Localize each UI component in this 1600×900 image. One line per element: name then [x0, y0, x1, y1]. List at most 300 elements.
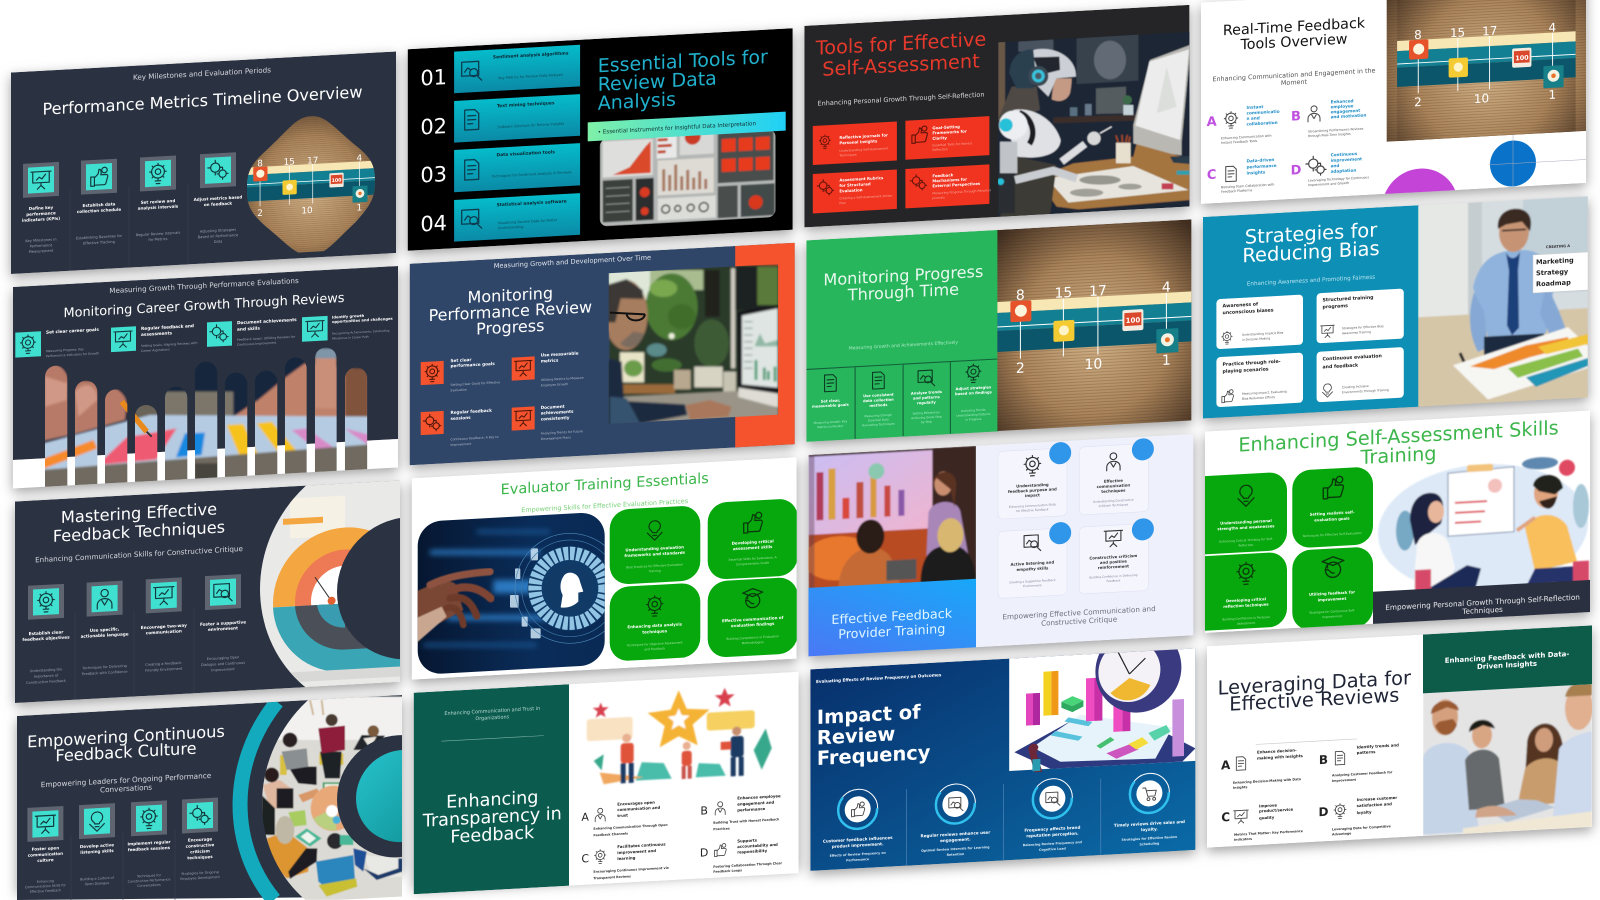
- step descriptions: Adjusting Strategies: [200, 228, 236, 234]
- step descriptions: for Metrics: [148, 237, 168, 242]
- panel: Monitoring Performance Review Progress: Continuous Feedback: A Key to: [450, 435, 498, 441]
- goal labels: and skills: [237, 326, 260, 333]
- heading: Transparency in: [422, 804, 562, 832]
- item D: D: [1291, 163, 1302, 179]
- isometric chart illustration: [1009, 623, 1195, 774]
- panel: Evaluator Training Essentials: Training: [648, 569, 661, 573]
- step descriptions: Understanding the: [30, 667, 62, 673]
- blue circle: [1490, 139, 1536, 188]
- panel: Impact of Review Frequency: Retention: [947, 852, 965, 857]
- item A: A: [581, 811, 589, 824]
- findings: loyalty.: [1141, 826, 1158, 832]
- goal descriptions: Recognizing Achievements: Celebrating: [332, 328, 390, 336]
- card text: assessment skills: [733, 544, 773, 551]
- dividers: [906, 779, 1101, 865]
- item C: learning: [617, 855, 636, 861]
- item B: Practices: [713, 826, 730, 831]
- caption bar: Empowering Personal Growth Through Self-Reflection: [1385, 593, 1580, 612]
- tool card: Data visualization: Techniques for Sentiment Analysis in Reviews: [491, 170, 572, 179]
- item D: D: [700, 846, 708, 860]
- item A: [1207, 103, 1280, 146]
- card: role-playing: [1216, 353, 1303, 407]
- item A: communication and: [617, 805, 661, 812]
- item D: Advantage: [1332, 831, 1351, 836]
- card text: Evaluation: [839, 187, 863, 193]
- item B: and motivation: [1331, 112, 1366, 119]
- step icons: [28, 574, 241, 620]
- item A: Instant: [1246, 104, 1263, 110]
- subheading: Empowering Leaders for Ongoing Performance: [41, 771, 211, 789]
- timeline image: 4: [1549, 20, 1556, 35]
- goal labels: Document achievements: [237, 318, 297, 326]
- panel: Enhancing Transparency in Feedback: [414, 672, 799, 894]
- panel: Evaluator Training Essentials: Essential Skills for Evaluators: A: [729, 555, 777, 562]
- item D: Fostering Collaboration Through Clear: [713, 861, 782, 869]
- item D: Feedback Loops: [713, 868, 742, 874]
- step labels: Establish clear: [29, 629, 63, 636]
- item C: insights: [1246, 169, 1266, 176]
- panel: Effective Feedback Provider Training: [803, 434, 1193, 657]
- panel: Essential Tools for Review Data Analysis: [408, 28, 793, 251]
- timeline image: 100: [1126, 316, 1140, 325]
- green cards: [1185, 466, 1373, 637]
- heading: Essential Tools for: [598, 46, 768, 77]
- goal labels: [46, 314, 392, 336]
- panel: Tools for Effective Self-Assessment: Understanding Self-Assessment: [839, 146, 888, 153]
- panel: Enhancing Self-Assessment Skills Training: Assessment: [1237, 621, 1256, 626]
- timeline image: 15: [1450, 25, 1465, 40]
- step descriptions: Establishing Baselines for: [76, 234, 122, 240]
- subheading: Constructive Critique: [1041, 615, 1118, 628]
- sign: CREATING A: [1546, 244, 1570, 249]
- column labels: Adjust strategies: [956, 385, 991, 391]
- goal labels: assessments: [141, 330, 173, 338]
- sign: Marketing: [1536, 256, 1574, 266]
- presentation photo: [808, 446, 976, 588]
- step labels: Set review and: [141, 198, 175, 205]
- card icons: [1024, 451, 1123, 551]
- card: continuous evaluation: Continuous evaluation: [1322, 354, 1382, 362]
- card text: Goal-Setting: [932, 124, 960, 130]
- heading: Real-Time Feedback: [1223, 16, 1365, 39]
- eyebrow text: Organizations: [475, 714, 510, 722]
- goal labels: Regular feedback and: [141, 324, 194, 332]
- dark inset circle: [337, 732, 459, 861]
- panel: Tools for Effective Self-Assessment: [804, 5, 1193, 238]
- item D: accountability and: [737, 842, 778, 849]
- item A: Encourages open: [617, 800, 655, 807]
- panel: Monitoring Performance Review Progress: [410, 243, 795, 465]
- card text: Enhancing data analysis: [627, 621, 682, 629]
- heading: Progress: [476, 316, 544, 339]
- panel: Tools for Effective Self-Assessment: Creating a Self-Assessment Action: [839, 194, 892, 200]
- timeline image: 2: [1016, 361, 1025, 377]
- heading: Empowering Continuous: [27, 722, 225, 751]
- column icons: [825, 364, 981, 392]
- item B: performance: [737, 806, 766, 813]
- findings: product improvement.: [832, 841, 884, 849]
- card: unconscious biases: Understanding Implicit Bias: [1242, 331, 1283, 337]
- subheading: Measuring Growth and Achievements Effectively: [849, 340, 958, 352]
- column labels: and patterns: [913, 395, 941, 401]
- card: unconscious biases: in Decision Making: [1242, 336, 1270, 342]
- card text: impact: [1025, 492, 1040, 498]
- subheading: Empowering Skills for Effective Evaluation Practices: [521, 497, 689, 514]
- heading: Leveraging Data for: [1218, 666, 1411, 700]
- card text: communication: [1097, 482, 1130, 489]
- heading: Feedback Techniques: [53, 517, 225, 546]
- title box: [808, 579, 976, 657]
- item C: Data-driven: [1246, 157, 1274, 164]
- item icons: [421, 356, 535, 436]
- illustration: two people with clipboard: [1378, 455, 1589, 624]
- step descriptions: Performance: [30, 243, 53, 248]
- subheading: Enhancing Awareness and Promoting Fairness: [1247, 275, 1375, 288]
- item A: collaboration: [1246, 120, 1278, 127]
- panel: Performance Metrics Timeline Overview: [11, 52, 396, 274]
- illustration: team and stars: [587, 685, 772, 785]
- card text: frameworks and standards: [624, 550, 686, 558]
- card text: Understanding evaluation: [625, 544, 684, 553]
- step labels: environment: [208, 625, 238, 632]
- item D: improvement: [1331, 156, 1362, 163]
- step labels: collection schedule: [77, 207, 121, 214]
- panel: Enhancing Self-Assessment Skills Training: Strategies for Continuous Self-: [1309, 608, 1355, 615]
- icon circles: [838, 772, 1169, 830]
- card text: Developing critical: [732, 538, 774, 546]
- step descriptions: Friendly Environment: [145, 667, 183, 673]
- step labels: criticism: [190, 848, 210, 854]
- card text: Reflective journals for: [839, 132, 888, 140]
- column labels: [812, 385, 993, 411]
- item labels: consistently: [541, 415, 570, 422]
- tool card: Data visualization: [454, 143, 580, 192]
- item B: B: [700, 804, 708, 818]
- step labels: Foster a supportive: [200, 619, 246, 627]
- heading: Strategies for: [1245, 219, 1377, 249]
- heading: Feedback Culture: [55, 739, 197, 765]
- step labels: analysis intervals: [138, 204, 179, 211]
- step labels: Establish data: [83, 201, 115, 208]
- panel: Evaluator Training Essentials: Methodologies: [742, 640, 764, 645]
- item A: Insights: [1233, 785, 1248, 790]
- step labels: communication: [28, 851, 63, 858]
- card text: Setting realistic self-: [1310, 509, 1354, 517]
- item B: engagement: [1331, 108, 1360, 114]
- item D: satisfaction and: [1357, 801, 1392, 808]
- item B: through Real-Time Insights: [1308, 132, 1351, 138]
- highlight band: [588, 112, 786, 141]
- step descriptions: Creating a Feedback-: [145, 661, 182, 667]
- card: unconscious biases: unconscious biases: [1222, 307, 1274, 316]
- item D: [700, 836, 783, 875]
- item C: Boosting Team Collaboration with: [1221, 183, 1274, 189]
- step descriptions: Open Dialogue: [85, 881, 109, 886]
- step labels: Adjust metrics based: [194, 194, 242, 202]
- panel: Evaluator Training Essentials: Best Practices for Effective Evaluation: [626, 562, 683, 570]
- timeline image: 10: [301, 206, 313, 217]
- item A: communicatio: [1246, 109, 1280, 116]
- step descriptions: Key Milestones in: [25, 238, 57, 243]
- main heading: Impact of: [817, 700, 921, 729]
- step labels: performance: [26, 210, 56, 217]
- timeline image: 8: [1414, 28, 1422, 42]
- step descriptions: Effective Tracking: [83, 240, 115, 246]
- item C: Feedback Platforms: [1221, 188, 1253, 194]
- sign: [1533, 243, 1588, 293]
- panel: Effective Feedback Provider Training: Understanding Constructive: [1093, 498, 1134, 504]
- step labels: [22, 194, 242, 223]
- panel: Impact of Review Frequency: [810, 623, 1195, 871]
- panel: Impact of Review Frequency: Balancing Review Frequency and: [1023, 840, 1082, 847]
- goal descriptions: [46, 328, 390, 358]
- arch photo strip: [45, 348, 368, 487]
- item A: Enhancing Communication with: [1221, 134, 1272, 140]
- dark inset circle: [337, 513, 479, 663]
- item C: C: [1221, 810, 1230, 825]
- panel: Evaluator Training Essentials: Techniques for Objective Assessment: [627, 640, 683, 647]
- card text: evaluation findings: [731, 621, 775, 628]
- item B: Building Trust with Honest Feedback: [713, 817, 779, 825]
- card: role-playing: Bias Reduction Efforts: [1242, 395, 1275, 401]
- timeline image: 2: [1414, 95, 1422, 109]
- card text: [839, 123, 981, 193]
- main heading: Frequency: [817, 741, 931, 770]
- small heading: Evaluating Effects of Review Frequency on Outcomes: [816, 672, 942, 684]
- panel: Mastering Effective Feedback Techniques: [15, 466, 479, 712]
- step labels: feedback objectives: [22, 635, 70, 642]
- card: unconscious biases: [1216, 295, 1303, 349]
- column labels: methods: [869, 403, 888, 408]
- column labels: data collection: [863, 398, 894, 403]
- goal descriptions: Milestones in Career Path: [332, 335, 369, 341]
- item A: [1221, 747, 1304, 791]
- card text: empathy skills: [1016, 565, 1049, 572]
- heading: Monitoring Progress: [823, 262, 983, 289]
- heading: Through Time: [847, 280, 959, 305]
- AI hand image: [410, 498, 625, 695]
- card text: Personal insights: [839, 138, 878, 145]
- step descriptions: Dialogue and Continuous: [201, 661, 245, 667]
- highlight band: • Essential Instruments for Insightful Data Interpretation: [598, 121, 756, 136]
- card: continuous evaluation: [1317, 347, 1404, 402]
- card text: Developing critical: [1226, 596, 1266, 603]
- step labels: Foster open: [32, 845, 59, 852]
- panel: Effective Feedback Provider Training: for Effective Feedback: [1016, 507, 1049, 513]
- card: role-playing: Measuring Impact: Evaluating: [1242, 389, 1287, 396]
- green header: [1423, 625, 1592, 693]
- card: structured training: [1317, 289, 1404, 343]
- dashboard photo: [600, 124, 776, 227]
- heading: Feedback: [450, 823, 535, 848]
- column labels: Set clear,: [821, 399, 840, 404]
- panel: Effective Feedback Provider Training: Environment: [1023, 583, 1042, 588]
- item labels: Document: [541, 404, 565, 410]
- step descriptions: [26, 655, 245, 685]
- panel: Monitoring Progress Through Time: Achieving Goals Step: [911, 415, 942, 420]
- step descriptions: Techniques for: [137, 873, 161, 878]
- card: structured training: Awareness Training: [1342, 330, 1371, 335]
- card text: Constructive criticism: [1089, 553, 1137, 561]
- tool card: Text mining: Software Solutions for Review Insights: [497, 122, 564, 129]
- card text: Active listening and: [1011, 560, 1054, 567]
- panel: Empowering Continuous Feedback Culture: [17, 686, 459, 900]
- heading: Mastering Effective: [61, 499, 217, 527]
- item A: Enhancing Communication Through Open: [593, 823, 668, 831]
- card text: Assessment Rubrics: [839, 175, 883, 182]
- step labels: actionable language: [81, 631, 129, 639]
- findings: reputation perception.: [1026, 831, 1079, 838]
- card text: Effective: [1104, 478, 1123, 484]
- tool card: Data visualization: Data visualization tools: [497, 149, 555, 158]
- item B: Analyzing Customer Feedback for: [1332, 770, 1392, 777]
- panel: Tools for Effective Self-Assessment: Techniques: [838, 153, 857, 158]
- item labels: performance goals: [451, 361, 495, 368]
- item A: A: [1221, 758, 1231, 773]
- card text: Feedback: [932, 172, 953, 178]
- panel: Real-Time Feedback Tools Overview: [1201, 0, 1586, 204]
- panel: Monitoring Progress Through Time: Harvesting Techniques: [862, 422, 895, 427]
- item D: responsibility: [737, 848, 768, 855]
- step descriptions: Encouraging Open: [207, 655, 239, 661]
- title box: Provider Training: [838, 622, 945, 643]
- goal labels: Set clear career goals: [46, 327, 99, 336]
- item B: Streamlining Performance Reviews: [1308, 127, 1363, 134]
- panel: Monitoring Progress Through Time: Analyzing Trends:: [961, 408, 986, 413]
- card text: Frameworks for: [932, 129, 967, 135]
- heading: Evaluator Training Essentials: [501, 471, 709, 498]
- tool card: Text mining: [454, 94, 580, 143]
- card text: strengths and weaknesses: [1217, 523, 1275, 531]
- item C: Metrics That Matter: Key Performance: [1234, 829, 1303, 837]
- item D: [1292, 152, 1369, 187]
- item B: [700, 793, 781, 832]
- panel: Monitoring Progress Through Time: Measuring Change:: [864, 413, 892, 418]
- main heading: Review: [817, 722, 895, 750]
- step descriptions: Based on Performance: [198, 233, 239, 239]
- timeline image: 4: [1162, 280, 1171, 296]
- step descriptions: Effective Feedback: [30, 888, 61, 894]
- timeline image: 1: [357, 203, 362, 214]
- item C: product/service: [1259, 807, 1294, 813]
- item labels: metrics: [541, 358, 559, 364]
- card: structured training: Strategies for Effective Bias: [1342, 324, 1384, 330]
- panel: Monitoring Career Growth Through Reviews: [13, 266, 398, 488]
- heading: Monitoring Career Growth Through Reviews: [63, 291, 345, 321]
- panel: Monitoring Performance Review Progress: Setting Clear Goals for Effective: [450, 380, 500, 387]
- timeline image: [1386, 0, 1586, 142]
- panel: Monitoring Performance Review Progress: Evaluation: [451, 388, 467, 392]
- panel: Leveraging Data for Effective Reviews: [1207, 625, 1593, 848]
- eyebrow text: Enhancing Communication and Trust in: [444, 706, 540, 717]
- heading: Tools for Effective: [816, 28, 986, 60]
- item A: n and: [1246, 115, 1260, 121]
- card text: and positive: [1100, 559, 1127, 565]
- item C: [1207, 157, 1277, 195]
- tool card: Sentiment analysis: [454, 45, 580, 93]
- card text: Understanding: [1016, 482, 1049, 489]
- item labels: achievements: [541, 409, 574, 416]
- subheading: Conversations: [100, 783, 152, 794]
- step descriptions: Measurement: [29, 249, 54, 254]
- tool card: Statistical analysis: [454, 193, 580, 242]
- step descriptions: Feedback with Confidence: [82, 670, 128, 676]
- step descriptions: Improvement: [211, 667, 235, 672]
- step descriptions: Techniques for Delivering: [82, 664, 127, 670]
- step labels: feedback sessions: [128, 845, 171, 852]
- item D: Increase customer: [1357, 795, 1397, 802]
- item C: [1221, 801, 1303, 843]
- teal circle: [356, 748, 448, 845]
- item B: B: [1291, 109, 1301, 125]
- card: continuous evaluation: Creating Inclusive: [1342, 384, 1369, 389]
- item D: adaptation: [1331, 168, 1356, 174]
- timeline image: [997, 219, 1191, 431]
- subheading: Moment: [1281, 78, 1308, 87]
- findings: engagement.: [940, 836, 971, 843]
- timeline image: 15: [1054, 285, 1072, 302]
- tool card: Text mining: Text mining techniques: [497, 100, 555, 109]
- panel: Impact of Review Frequency: Scheduling: [1139, 841, 1160, 846]
- card: structured training: programs: [1322, 303, 1348, 310]
- subheading: Enhancing Personal Growth Through Self-Reflection: [818, 91, 984, 108]
- item labels: sessions: [451, 415, 471, 421]
- findings: Regular reviews enhance user: [921, 830, 990, 838]
- findings: Timely reviews drive sales and: [1114, 819, 1185, 828]
- heading: Training: [1359, 442, 1437, 469]
- panel: Impact of Review Frequency: Optimal Review Intervals for Learning: [921, 845, 990, 853]
- item B: B: [1319, 753, 1328, 767]
- timeline image: 17: [1089, 283, 1107, 300]
- card icons: [1237, 476, 1344, 585]
- item A: making with insights: [1257, 753, 1304, 761]
- item C: Indicators: [1234, 837, 1252, 842]
- item D: [1319, 795, 1397, 837]
- step labels: communication: [146, 628, 182, 635]
- item A: Enhance decision-: [1257, 747, 1297, 755]
- item A: trust: [617, 813, 628, 818]
- heading: Review Data: [598, 68, 717, 96]
- item A: Feedback Channels: [593, 832, 628, 837]
- timeline image: 1: [1162, 353, 1171, 369]
- item C: [581, 841, 669, 881]
- panel: Monitoring Progress Through Time: Understanding Patterns: [956, 412, 991, 418]
- panel: Impact of Review Frequency: Cognitive Load: [1039, 846, 1067, 852]
- timeline image: 15: [284, 157, 295, 168]
- step descriptions: Importance of: [34, 673, 59, 679]
- heading: Effective Reviews: [1229, 684, 1399, 716]
- timeline image: [244, 112, 376, 255]
- card text: improvement: [1318, 596, 1346, 602]
- card text: Understanding personal: [1220, 518, 1272, 526]
- panel: Monitoring Progress Through Time: Measuring Growth: Key: [814, 419, 847, 425]
- panel: Tools for Effective Self-Assessment: Reflection: [932, 147, 948, 152]
- step descriptions: Constructive Feedback: [26, 679, 67, 685]
- item C: C: [1207, 168, 1216, 183]
- eyebrow text: Measuring Growth and Development Over Time: [494, 254, 651, 270]
- item C: Transparent Reviews: [593, 874, 631, 880]
- item labels: Use measurable: [541, 351, 579, 358]
- card text: feedback purpose and: [1008, 486, 1057, 494]
- subheading: Enhancing Communication and Engagement in the: [1212, 66, 1376, 83]
- step descriptions: Conversations: [137, 883, 161, 888]
- step labels: Develop active: [80, 842, 114, 849]
- item D: and: [1331, 163, 1339, 168]
- item B: Enhanced: [1331, 98, 1354, 104]
- card: unconscious biases: Awareness of: [1222, 303, 1258, 309]
- panel: Evaluator Training Essentials: and Feedback: [644, 646, 665, 652]
- caption bar: [1373, 580, 1590, 625]
